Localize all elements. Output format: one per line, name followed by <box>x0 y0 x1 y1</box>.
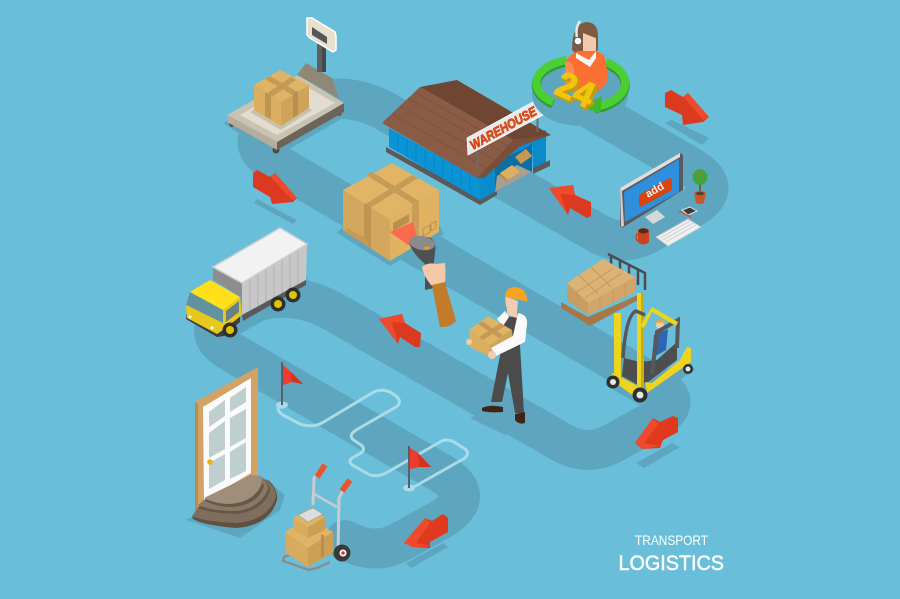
warehouse sign: WAREHOUSE <box>467 103 539 153</box>
coffee mug <box>636 228 649 244</box>
add button: add <box>644 180 666 201</box>
winding road shadow path <box>214 98 708 549</box>
route line between flags <box>278 390 468 488</box>
operator figure <box>565 21 607 94</box>
icon: front door with steps <box>186 367 285 538</box>
icon: worker carrying box <box>466 287 535 435</box>
icon: hand with barcode scanner <box>390 222 456 327</box>
icon: weighing scale with box <box>224 18 350 156</box>
arrow: bottom near trolley <box>404 514 448 568</box>
24 face: 24 <box>550 64 601 116</box>
potted plant <box>692 169 708 204</box>
icon: large cardboard box <box>337 163 444 266</box>
arrow: below the forklift <box>635 416 680 468</box>
icon: computer monitor desk <box>618 153 708 246</box>
24 extrusion: 24 <box>552 66 603 118</box>
title: transport logistics <box>618 532 724 575</box>
keyboard <box>656 219 701 246</box>
arrow: by the warehouse <box>546 185 591 232</box>
icon: red flag start <box>276 362 303 408</box>
subtitle: TRANSPORT <box>635 532 708 548</box>
icon: forklift with pallet <box>561 254 695 405</box>
icon: call center operator 24/7 <box>532 21 628 126</box>
icon: hand trolley with boxes <box>283 465 350 570</box>
icon: warehouse building <box>382 80 551 205</box>
icon: delivery truck <box>186 228 310 345</box>
arrow: top right <box>665 90 709 145</box>
label: 24 <box>550 64 603 118</box>
arrow: by the scanner <box>375 314 421 360</box>
arrow: by the scale <box>253 170 297 224</box>
icon: red flag end <box>403 446 431 492</box>
main title: LOGISTICS <box>618 552 724 575</box>
door steps <box>192 475 277 528</box>
